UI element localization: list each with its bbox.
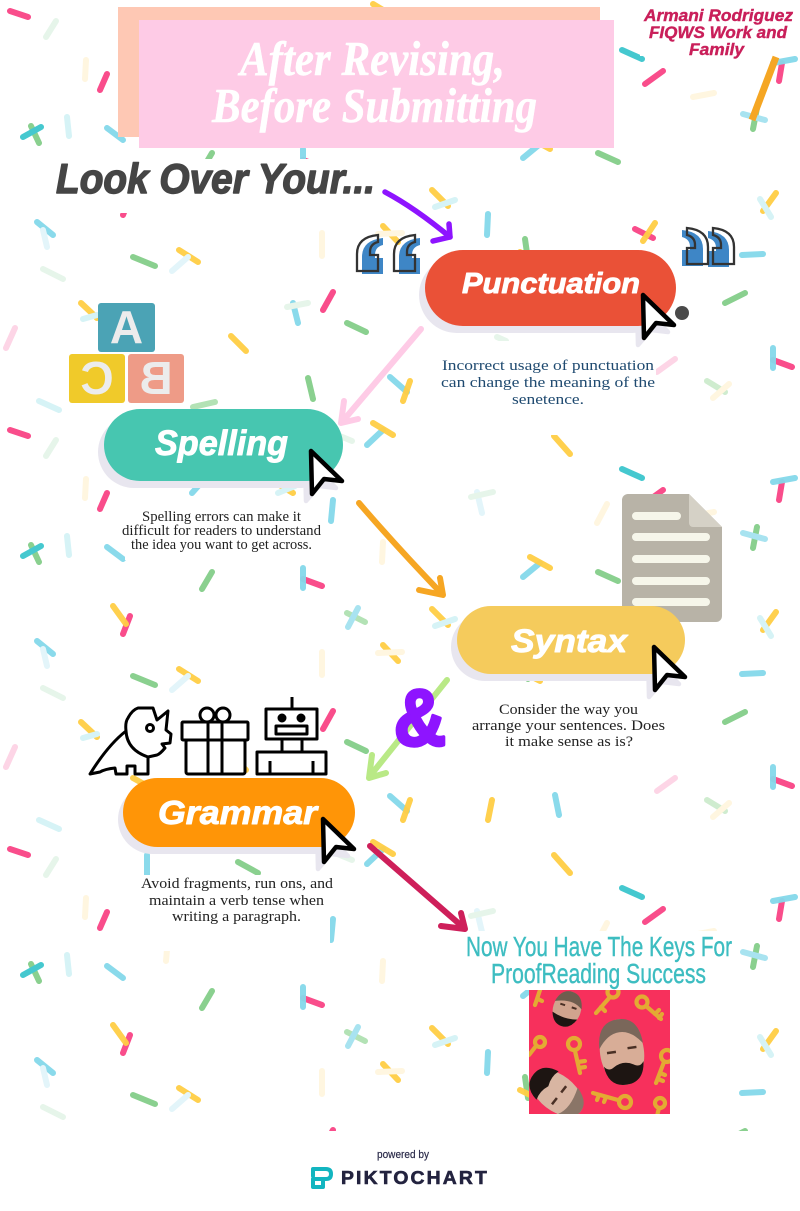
arrow: orange to syntax	[359, 503, 443, 595]
cursor	[323, 819, 354, 862]
author credit	[643, 7, 794, 59]
spelling label: Spelling	[155, 424, 288, 463]
closing message	[466, 931, 732, 989]
syntax description: arrange your sentences. Does	[472, 718, 665, 734]
grammar description: writing a paragraph.	[172, 909, 301, 925]
logo icon	[313, 1169, 331, 1187]
punctuation description: Incorrect usage of punctuation	[442, 358, 655, 374]
icon: opening quotes	[357, 235, 420, 274]
grammar description: Avoid fragments, run ons, and	[141, 876, 334, 892]
punctuation label: Punctuation	[462, 268, 640, 300]
gray dot	[675, 306, 689, 320]
spelling pill	[98, 409, 343, 501]
heading: look over your: Look Over Your...	[56, 155, 375, 202]
grammar description	[141, 876, 334, 925]
syntax label: Syntax	[511, 623, 628, 659]
cursor	[643, 295, 674, 338]
punctuation description	[441, 358, 655, 408]
icon: document	[622, 494, 722, 622]
punctuation pill	[419, 250, 689, 345]
icon: abc blocks: B	[139, 352, 173, 404]
cursor	[654, 647, 685, 690]
rotated face	[529, 1068, 584, 1114]
decorative orange stroke	[752, 57, 776, 120]
syntax description: Consider the way you	[499, 702, 638, 718]
author credit: Armani Rodriguez	[643, 7, 794, 25]
grammar description: maintain a verb tense when	[149, 893, 325, 909]
arrow: crimson to closing message	[370, 846, 465, 929]
arrow: pink to spelling	[341, 329, 421, 423]
banner front panel	[139, 20, 614, 148]
spelling description: the idea you want to get across.	[131, 537, 312, 553]
icon: abc blocks: C	[80, 352, 114, 404]
grammar label: Grammar	[158, 794, 319, 831]
icon: abc blocks	[69, 301, 184, 404]
syntax description: it make sense as is?	[505, 734, 633, 750]
punctuation description: can change the meaning of the	[441, 375, 655, 391]
syntax pill	[451, 606, 685, 697]
syntax description	[472, 702, 665, 750]
grammar pill	[118, 778, 355, 869]
cursor	[311, 451, 342, 494]
icon: closing quotes	[682, 228, 734, 267]
arrow: green to grammar	[369, 680, 447, 778]
arrow: purple to punctuation	[385, 192, 450, 241]
logo wordmark: PIKTOCHART	[341, 1168, 489, 1188]
small face	[552, 991, 582, 1027]
author credit: Family	[689, 41, 745, 59]
banner back panel	[118, 7, 600, 137]
title banner	[118, 7, 614, 148]
icon: ampersand: &	[394, 673, 446, 762]
icon: dinosaur	[90, 708, 171, 774]
image: keys and faces	[529, 990, 670, 1114]
spelling description: difficult for readers to understand	[122, 523, 322, 539]
spelling description	[122, 509, 322, 553]
keys	[529, 986, 673, 1116]
powered by: powered by	[377, 1149, 429, 1161]
punctuation description: senetence.	[512, 392, 584, 408]
author credit: FIQWS Work and	[649, 24, 788, 42]
large face	[599, 1019, 644, 1085]
piktochart attribution	[313, 1149, 489, 1188]
title text: Before Submitting	[211, 78, 537, 133]
icon: robot	[257, 697, 326, 774]
spelling description: Spelling errors can make it	[142, 509, 301, 525]
icon: gift	[182, 708, 248, 774]
text background masks	[50, 4, 796, 990]
closing message: ProofReading Success	[491, 958, 706, 989]
title text: After Revising,	[237, 31, 505, 86]
icon: abc blocks: A	[110, 301, 143, 353]
